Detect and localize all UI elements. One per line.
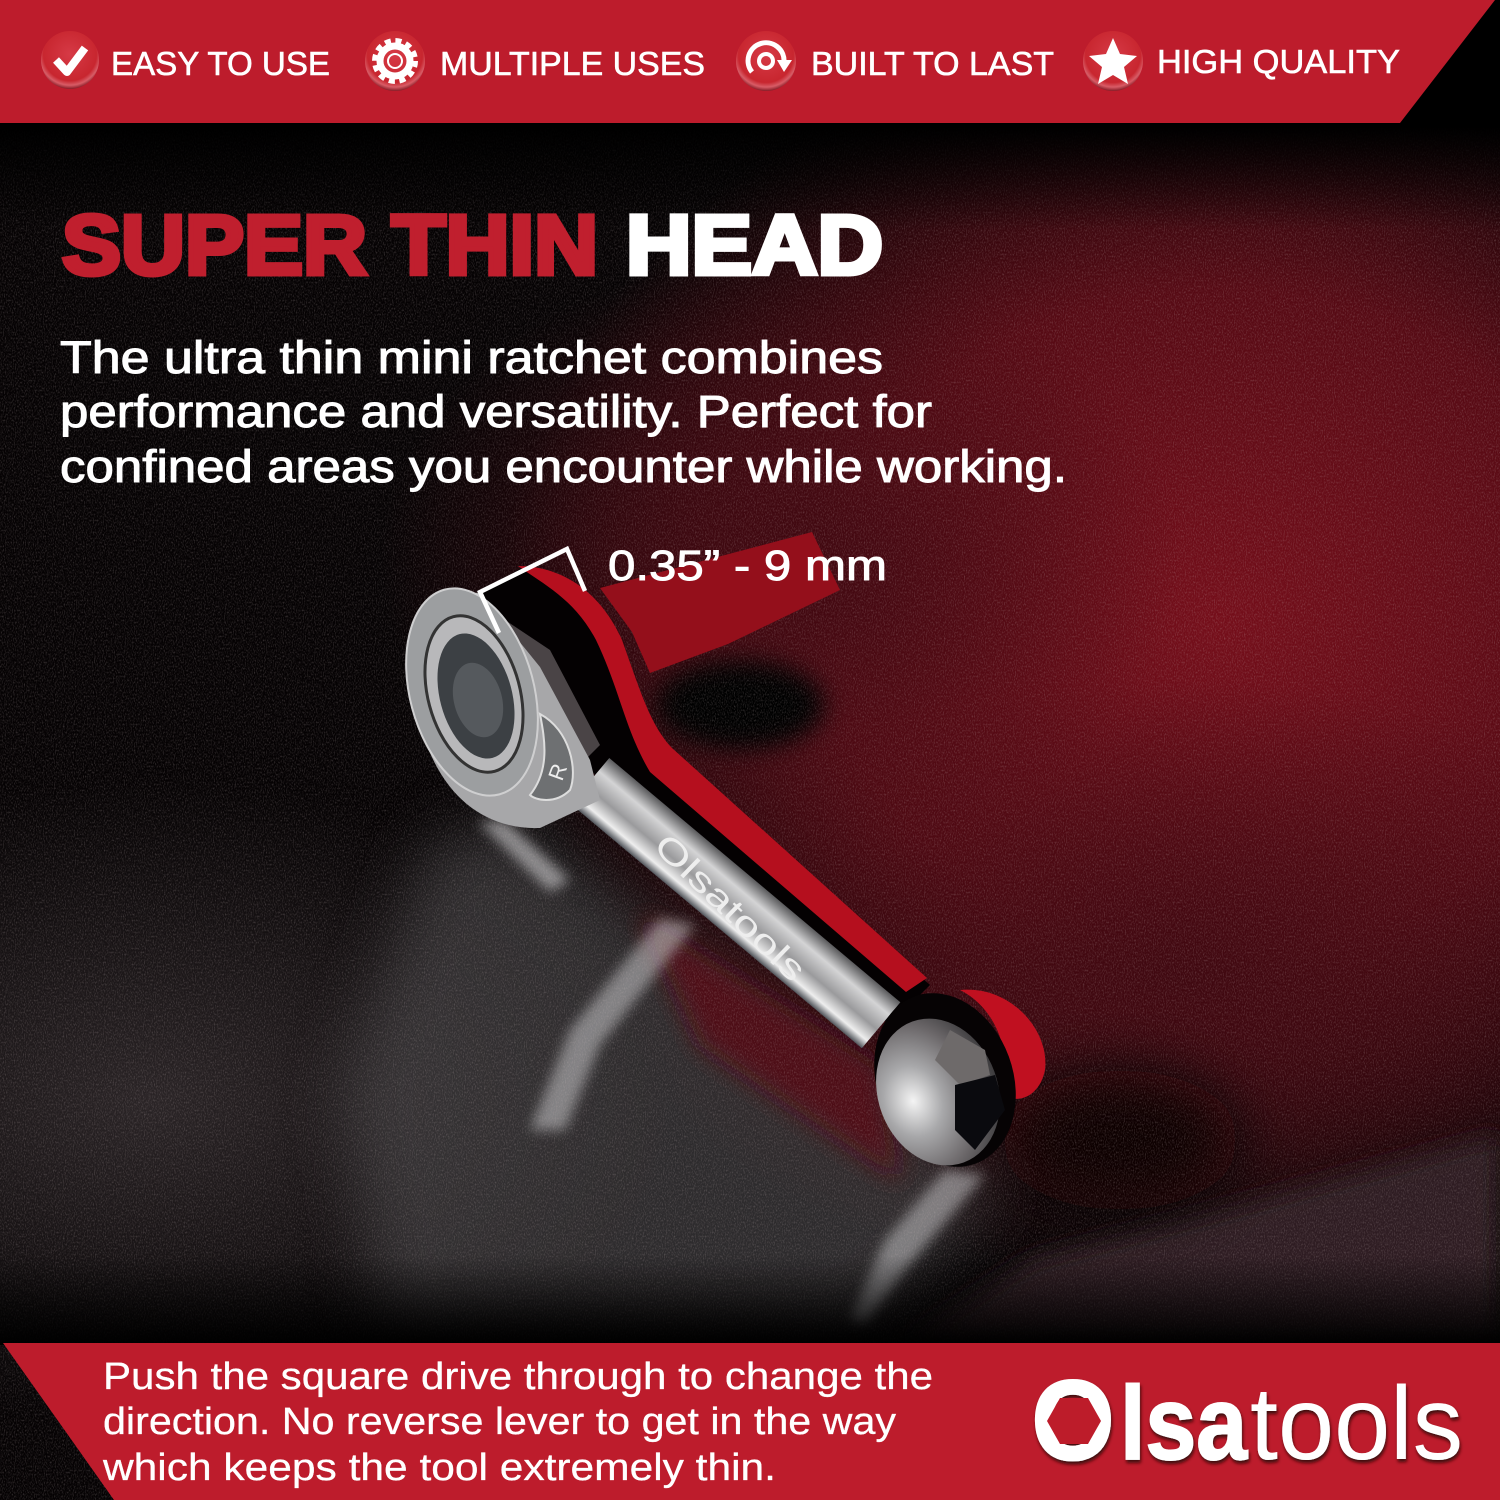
- badge: built to last: BUILT TO LAST: [811, 45, 1054, 82]
- badge: easy to use: [41, 31, 330, 89]
- badge: built to last: [736, 31, 1054, 91]
- icon: star: [1083, 31, 1143, 91]
- badge: easy to use: EASY TO USE: [111, 45, 330, 82]
- chrome ball end: [851, 973, 1039, 1187]
- description text: [60, 332, 1067, 492]
- bottom banner: [3, 1343, 1500, 1500]
- logo: O: [1032, 1358, 1114, 1483]
- ratchet tool photo: [385, 532, 1045, 1187]
- logo: tools: [1250, 1366, 1463, 1482]
- icon: cycle arrows: [736, 31, 796, 91]
- badge: multiple uses: MULTIPLE USES: [440, 45, 705, 82]
- icon: check mark: [41, 31, 99, 89]
- description text: performance and versatility. Perfect for: [60, 386, 932, 437]
- black side of the tool: [480, 566, 930, 1025]
- icon: gear: [365, 31, 425, 91]
- top banner: [0, 0, 1495, 123]
- badge: high quality: [1083, 31, 1400, 91]
- bottom note text: which keeps the tool extremely thin.: [102, 1447, 776, 1489]
- badge: high quality: HIGH QUALITY: [1157, 43, 1400, 80]
- handle engraved brand: Olsatools: [646, 826, 813, 989]
- title: [62, 198, 883, 292]
- description text: The ultra thin mini ratchet combines: [60, 332, 883, 383]
- red edge of the tool: [518, 566, 927, 992]
- bottom note text: direction. No reverse lever to get in the way: [103, 1401, 896, 1443]
- description text: confined areas you encounter while working.: [60, 441, 1067, 492]
- red socket behind the head: [600, 532, 840, 673]
- badge: multiple uses: [365, 31, 705, 91]
- dimension callout: 0.35” - 9 mm: [608, 542, 887, 590]
- bottom note text: Push the square drive through to change the: [103, 1356, 933, 1398]
- dark metal side band: [505, 620, 600, 760]
- handle: [571, 758, 900, 1048]
- light reflection of the ratchet on the table: [340, 820, 1000, 1330]
- logo: lsa: [1120, 1366, 1248, 1482]
- title: HEAD: [626, 198, 883, 292]
- dimension callout: [480, 542, 887, 633]
- ratchet head: [385, 574, 600, 828]
- title: SUPER THIN: [62, 198, 598, 292]
- ball end red edge: [960, 990, 1045, 1099]
- bottom note text: [102, 1356, 933, 1489]
- direction mark: R: [543, 760, 572, 784]
- logo: [1032, 1358, 1463, 1483]
